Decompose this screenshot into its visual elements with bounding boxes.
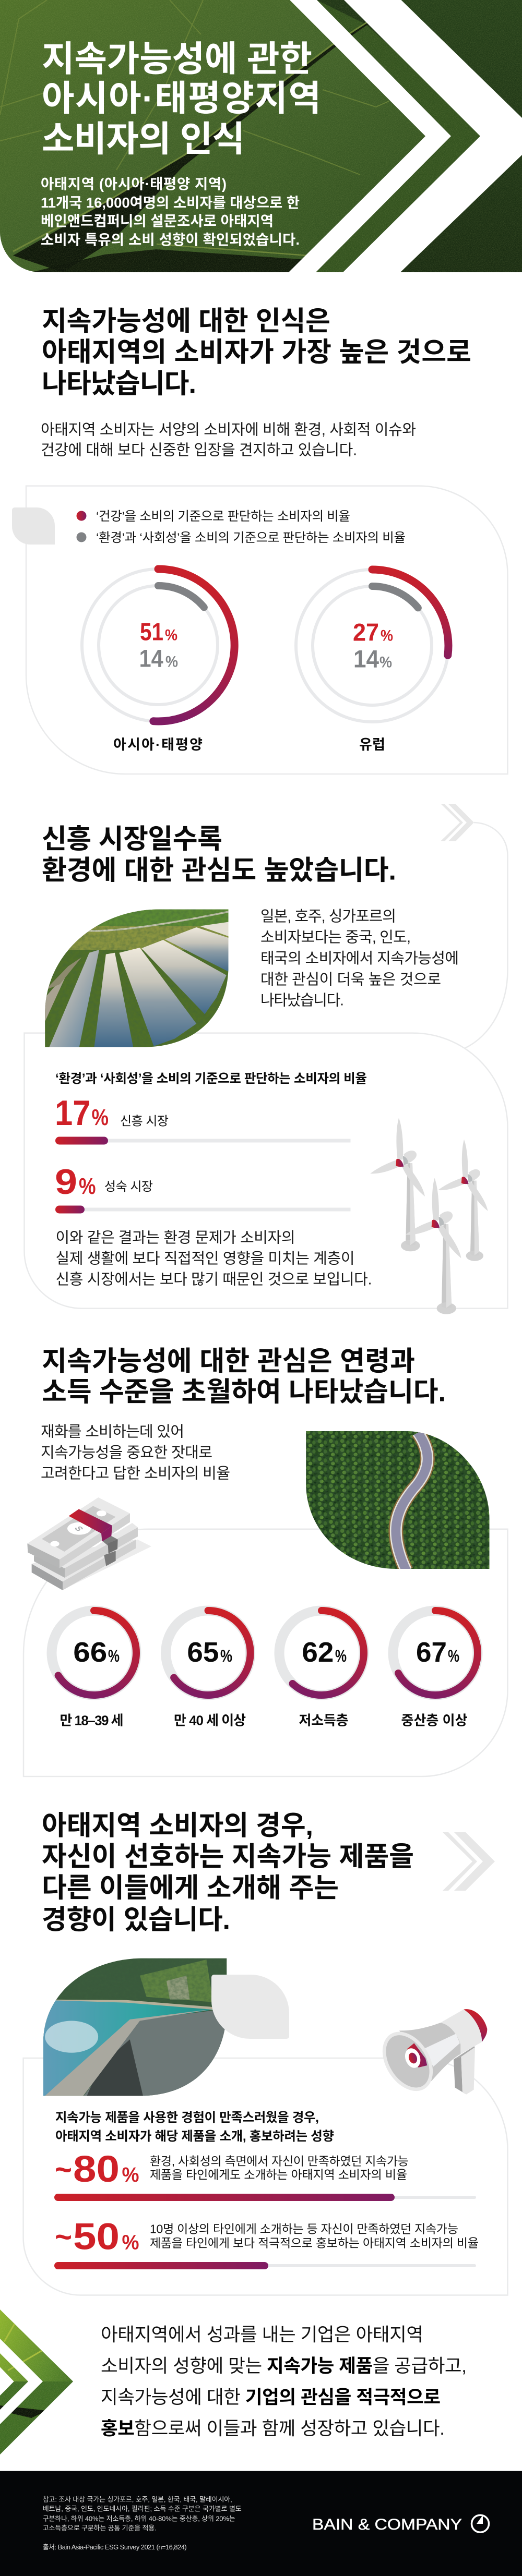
- legend: ‘건강’을 소비의 기준으로 판단하는 소비자의 비율: [96, 509, 350, 524]
- donut: europe: %: [379, 654, 392, 671]
- white chevrons: [289, 0, 522, 272]
- heading: section 3: 소득 수준을 초월하여 나타났습니다.: [42, 1377, 446, 1408]
- heading: section 3: 지속가능성에 대한 관심은 연령과: [42, 1347, 415, 1377]
- photo: forest road leaf: [305, 1430, 491, 1570]
- stat: mature markets 9%: %: [79, 1174, 96, 1199]
- donut: age 18-39: 만 18–39 세: [60, 1712, 123, 1728]
- heading: section 1: [42, 307, 471, 400]
- hero subtitle: 소비자 특유의 소비 성향이 확인되었습니다.: [41, 232, 300, 248]
- donut: europe: %: [381, 627, 393, 645]
- donut: asia-pacific: 아시아·태평양: [113, 737, 203, 753]
- decorative chevrons: [443, 1832, 495, 1891]
- footnotes: 고소득층으로 구분하는 공통 기준을 적용.: [43, 2524, 157, 2532]
- heading: section 4: 다른 이들에게 소개해 주는: [42, 1873, 339, 1904]
- heading: section 2: 환경에 대한 관심도 높았습니다.: [42, 856, 396, 886]
- closing statement: 홍보함으로써 이들과 함께 성장하고 있습니다.: [101, 2418, 445, 2439]
- section 2 body text: [260, 908, 459, 1009]
- photo: solar panels leaf: [43, 908, 230, 1048]
- closing statement: 지속가능성에 대한 기업의 관심을 적극적으로: [101, 2387, 441, 2408]
- stat: about 50%: [54, 2216, 479, 2269]
- stat: emerging markets 17%: [55, 1093, 351, 1144]
- closing statement: 아태지역에서 성과를 내는 기업은 아태지역: [101, 2324, 423, 2345]
- panel explanation text: [55, 1229, 372, 1288]
- section 3 body text: 재화를 소비하는데 있어: [41, 1423, 184, 1440]
- stat: about 80%: [54, 2149, 476, 2201]
- donut: age 40 plus: 만 40 세 이상: [174, 1712, 246, 1728]
- hero banner: [0, 0, 522, 272]
- stat: emerging markets 17%: 17: [55, 1093, 91, 1133]
- stat: about 80%: 환경, 사회성의 측면에서 자신이 만족하였던 지속가능: [150, 2154, 409, 2168]
- stat: about 80%: %: [122, 2163, 139, 2186]
- icon: stack of money: S: [72, 1525, 85, 1532]
- stat: about 50%: 50: [73, 2216, 120, 2257]
- donut: europe: [296, 570, 448, 753]
- panel explanation text: 신흥 시장에서는 보다 많기 때문인 것으로 보입니다.: [55, 1271, 372, 1288]
- hero subtitle: 아태지역 (아시아·태평양 지역): [41, 176, 227, 192]
- hero leaf photo: [0, 0, 522, 272]
- section 1 body text: 건강에 대해 보다 신중한 입장을 견지하고 있습니다.: [41, 441, 357, 458]
- decorative grey leaf tab: [12, 507, 55, 545]
- logo: Bain & Company: BAIN & COMPANY: [312, 2516, 462, 2533]
- section 1 body text: [41, 421, 416, 458]
- icon: wind turbines: [370, 1118, 488, 1314]
- heading: section 2: [42, 825, 396, 886]
- section 2 body text: 나타났습니다.: [260, 992, 344, 1009]
- panel title: ‘환경’과 ‘사회성’을 소비의 기준으로 판단하는 소비자의 비율: [55, 1071, 367, 1086]
- stat: about 50%: 제품을 타인에게 보다 적극적으로 홍보하는 아태지역 소비자의 비율: [150, 2236, 479, 2250]
- donut: low income: [279, 1611, 364, 1728]
- donut: age 40 plus: 65: [187, 1637, 219, 1668]
- donut: asia-pacific: %: [165, 627, 177, 644]
- donut: asia-pacific: [82, 569, 234, 753]
- donut: middle income and above: 67: [416, 1637, 447, 1668]
- panel subtitle: [55, 2111, 334, 2144]
- decorative grey leaf: [211, 1975, 289, 2039]
- stat: mature markets 9%: 9: [55, 1162, 77, 1202]
- heading: section 2: 신흥 시장일수록: [42, 825, 222, 855]
- donut: age 18-39: %: [108, 1647, 120, 1665]
- donut: low income: 62: [302, 1637, 334, 1668]
- leaf chevron accent: [0, 2308, 76, 2457]
- panel subtitle: 아태지역 소비자가 해당 제품을 소개, 홍보하려는 성향: [55, 2130, 334, 2144]
- closing statement: 소비자의 성향에 맞는 지속가능 제품을 공급하고,: [101, 2355, 467, 2376]
- footnotes: 참고: 조사 대상 국가는 싱가포르, 호주, 일본, 한국, 태국, 말레이시아,: [43, 2495, 232, 2503]
- panel: environment and social share by market: [24, 908, 507, 1314]
- panel: emerging market outline and chevrons: [441, 804, 507, 1048]
- section 3 body text: 고려한다고 답한 소비자의 비율: [41, 1465, 230, 1482]
- footnotes: [43, 2495, 242, 2551]
- donut: age 18-39: [52, 1611, 136, 1728]
- icon: megaphone: [372, 2009, 487, 2100]
- donut: age 40 plus: %: [220, 1647, 232, 1665]
- closing statement: [101, 2324, 467, 2439]
- stat: emerging markets 17%: %: [92, 1105, 109, 1130]
- donut: low income: %: [335, 1647, 347, 1665]
- section 3 body text: [41, 1423, 230, 1482]
- heading: section 1: 지속가능성에 대한 인식은: [42, 307, 330, 337]
- hero subtitle: 11개국 16,000여명의 소비자를 대상으로 한: [41, 195, 300, 211]
- photo: dam and lake leaf: [42, 1957, 228, 2097]
- hero title: 아시아·태평양지역: [42, 79, 321, 118]
- stat: about 80%: ~: [55, 2152, 72, 2187]
- panel: referral tendency: [23, 1957, 508, 2295]
- heading: section 4: 자신이 선호하는 지속가능 제품을: [42, 1842, 414, 1872]
- stat: mature markets 9%: 성숙 시장: [104, 1180, 153, 1194]
- donut: age 18-39: 66: [73, 1637, 107, 1668]
- section 1 body text: 아태지역 소비자는 서양의 소비자에 비해 환경, 사회적 이슈와: [41, 421, 416, 438]
- section 2 body text: 대한 관심이 더욱 높은 것으로: [260, 971, 441, 988]
- stat: about 50%: %: [122, 2231, 139, 2254]
- heading: section 1: 아태지역의 소비자가 가장 높은 것으로: [42, 337, 471, 368]
- donut: europe: 27: [353, 619, 379, 646]
- stat: about 80%: 80: [73, 2149, 120, 2190]
- donut: asia-pacific: 51: [140, 618, 163, 646]
- donut: middle income and above: [393, 1611, 478, 1728]
- panel: interest across age and income: [23, 1430, 507, 1776]
- stat: mature markets 9%: [55, 1162, 351, 1213]
- donut: europe: 유럽: [359, 737, 385, 753]
- panel explanation text: 이와 같은 결과는 환경 문제가 소비자의: [55, 1229, 295, 1246]
- donut: asia-pacific: 14: [139, 645, 163, 672]
- donut: middle income and above: 중산층 이상: [401, 1712, 468, 1728]
- section 2 body text: 소비자보다는 중국, 인도,: [260, 929, 411, 946]
- footnotes: 출처: Bain Asia-Pacific ESG Survey 2021 (n=16,824): [43, 2543, 187, 2551]
- donut: age 40 plus: [166, 1611, 251, 1728]
- heading: section 4: 경향이 있습니다.: [42, 1905, 230, 1935]
- stat: emerging markets 17%: 신흥 시장: [120, 1115, 169, 1129]
- footnotes: 구분하나, 하위 40%는 저소득층, 하위 40-80%는 중산층, 상위 20%는: [43, 2514, 235, 2522]
- icon: stack of money: [27, 1497, 151, 1590]
- section 2 body text: 태국의 소비자에서 지속가능성에: [260, 950, 459, 967]
- hero subtitle: [41, 176, 300, 248]
- heading: section 4: [42, 1811, 414, 1935]
- donut: asia-pacific: %: [165, 653, 178, 671]
- hero title: [42, 40, 321, 159]
- stat: about 50%: ~: [55, 2219, 72, 2254]
- donut: low income: 저소득층: [299, 1712, 349, 1728]
- footer: [0, 2471, 522, 2576]
- panel subtitle: 지속가능 제품을 사용한 경험이 만족스러웠을 경우,: [55, 2111, 319, 2125]
- stat: about 80%: 제품을 타인에게도 소개하는 아태지역 소비자의 비율: [150, 2168, 407, 2181]
- donut: europe: 14: [353, 645, 379, 673]
- panel: asia-pacific vs europe: [12, 486, 507, 774]
- panel explanation text: 실제 생활에 보다 직접적인 영향을 미치는 계층이: [55, 1250, 355, 1267]
- heading: section 1: 나타났습니다.: [42, 369, 196, 400]
- hero title: 지속가능성에 관한: [42, 40, 312, 79]
- heading: section 3: [42, 1347, 446, 1408]
- footnotes: 베트남, 중국, 인도, 인도네시아, 필리핀; 소득 수준 구분은 국가별로 별도: [43, 2505, 242, 2513]
- legend: [76, 509, 406, 545]
- hero subtitle: 베인앤드컴퍼니의 설문조사로 아태지역: [41, 213, 274, 229]
- stat: about 50%: 10명 이상의 타인에게 소개하는 등 자신이 만족하였던 지속가능: [150, 2222, 458, 2235]
- section 3 body text: 지속가능성을 중요한 잣대로: [41, 1444, 212, 1461]
- section 2 body text: 일본, 호주, 싱가포르의: [260, 908, 396, 925]
- heading: section 4: 아태지역 소비자의 경우,: [42, 1811, 313, 1841]
- donut: middle income and above: %: [448, 1647, 459, 1665]
- hero title: 소비자의 인식: [42, 119, 245, 159]
- legend: ‘환경’과 ‘사회성’을 소비의 기준으로 판단하는 소비자의 비율: [96, 530, 406, 545]
